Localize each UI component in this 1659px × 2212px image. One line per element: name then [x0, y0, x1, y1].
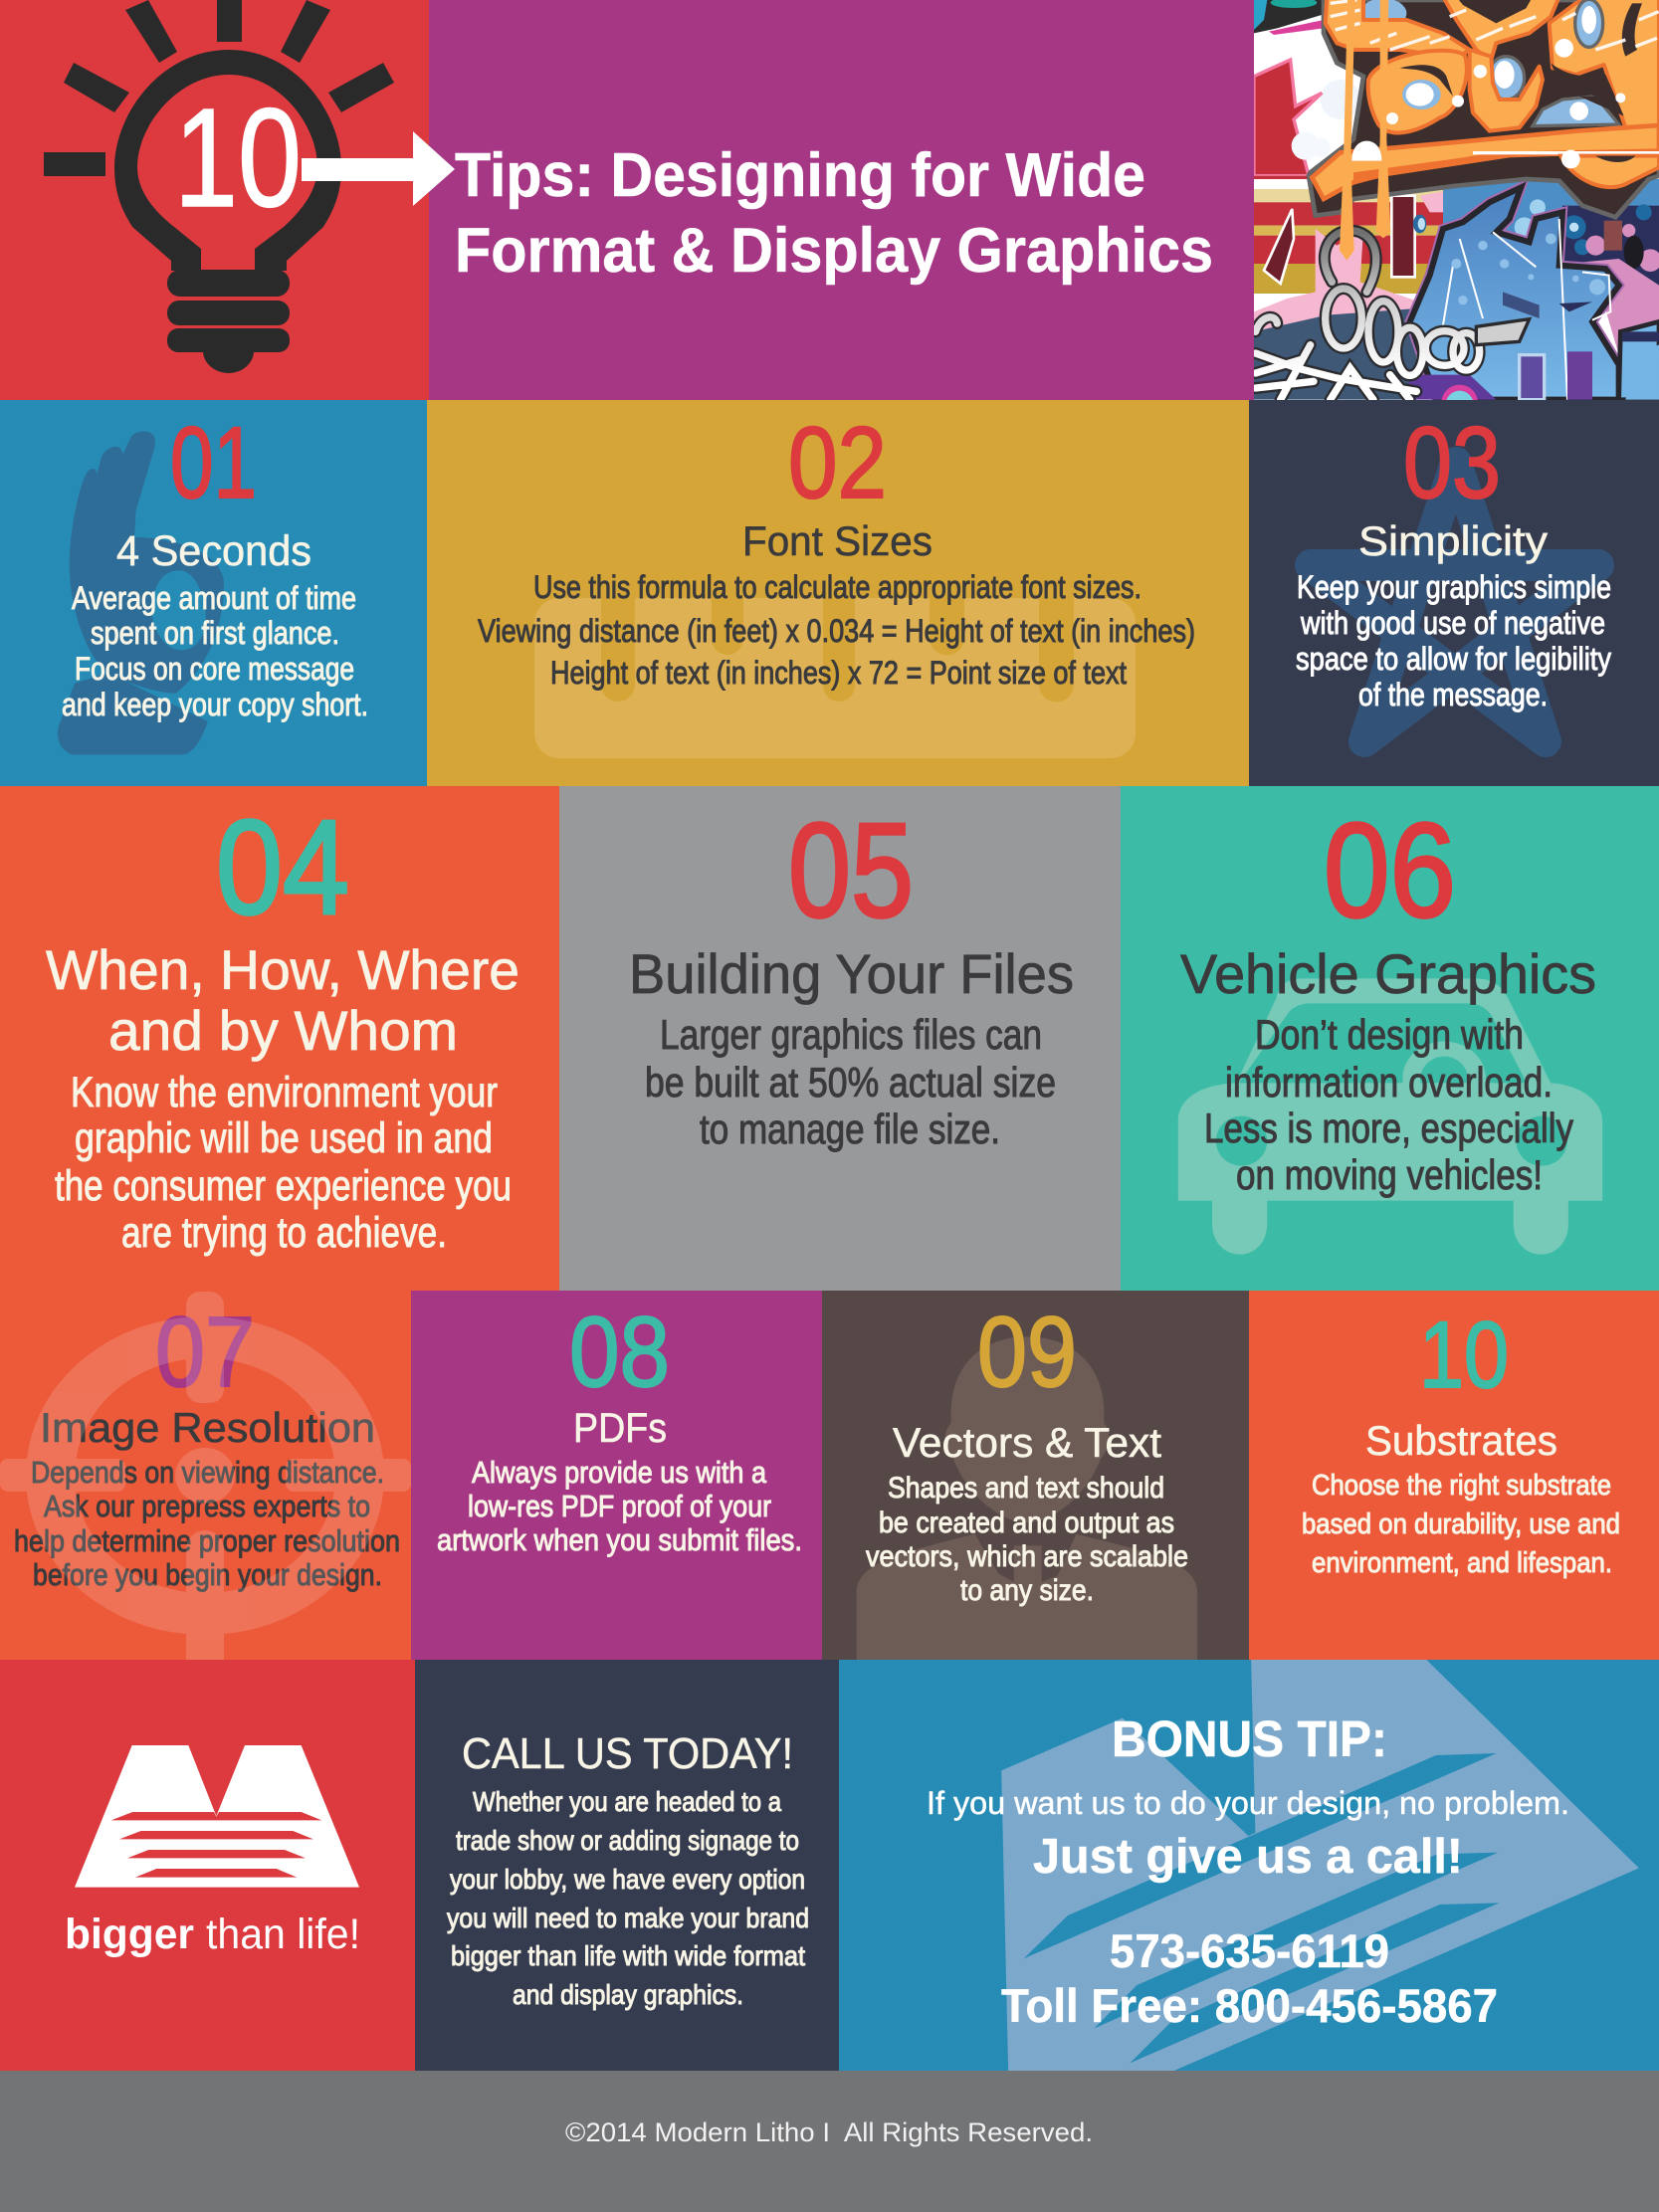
panel: bonus tip: [839, 1660, 1659, 2071]
icon: ruler: [534, 598, 1136, 758]
text block: trade show or adding signage to: [456, 1825, 799, 1856]
title: [455, 141, 1213, 286]
text block: information overload.: [1225, 1059, 1553, 1106]
text block: [447, 1786, 809, 2010]
text block: Focus on core message: [75, 651, 354, 687]
panel: tip 07: [0, 1291, 411, 1660]
text block: [1296, 569, 1611, 712]
text block: [55, 1069, 512, 1257]
number 07: 07: [155, 1297, 255, 1408]
tagline: bigger: [65, 1910, 194, 1958]
heading: Substrates: Substrates: [1365, 1417, 1557, 1464]
text block: and keep your copy short.: [62, 687, 368, 722]
panel: graffiti image: [1254, 0, 1659, 421]
title: Format & Display Graphics: [455, 216, 1213, 286]
text block: with good use of negative: [1300, 605, 1605, 641]
text block: before you begin your design.: [33, 1557, 382, 1592]
number 05: 05: [788, 795, 914, 945]
text block: help determine proper resolution: [14, 1523, 400, 1558]
text block: [866, 1472, 1188, 1607]
panel: tip 01: [0, 400, 427, 786]
text block: space to allow for legibility: [1296, 641, 1611, 677]
title: Tips: Designing for Wide: [455, 141, 1145, 210]
icon: M logo: [75, 1745, 359, 1888]
number 03: 03: [1403, 406, 1501, 519]
panel: call us today: [415, 1660, 839, 2071]
heading: Image Resolution: Image Resolution: [40, 1404, 375, 1451]
number 09: 09: [977, 1297, 1077, 1408]
text block: Whether you are headed to a: [473, 1786, 781, 1817]
number 06: 06: [1324, 795, 1456, 945]
heading: Font Sizes: Font Sizes: [742, 517, 933, 564]
number 04: 04: [216, 792, 349, 942]
text block: the consumer experience you: [55, 1162, 512, 1210]
panel: tip 10: [1249, 1291, 1659, 1660]
text block: are trying to achieve.: [121, 1209, 447, 1257]
heading: Building Your Files: Building Your Files: [629, 942, 1074, 1005]
text block: your lobby, we have every option: [450, 1864, 805, 1895]
text block: Don’t design with: [1255, 1011, 1524, 1058]
text block: Know the environment your: [71, 1069, 498, 1116]
heading: When, How, Where and by Whom: [46, 938, 519, 1062]
text block: be created and output as: [879, 1507, 1174, 1539]
icon: lightbulb with 10: [44, 0, 394, 373]
heading: PDFs: PDFs: [573, 1404, 667, 1451]
text block: Depends on viewing distance.: [31, 1455, 384, 1490]
text block: [1302, 1470, 1620, 1579]
orange letters: [1326, 0, 1659, 132]
text block: to manage file size.: [700, 1106, 1000, 1152]
panel: tip 02: [427, 400, 1249, 786]
panel: tip 08: [411, 1291, 822, 1660]
icon: hand: [58, 431, 224, 754]
arrow: [302, 131, 455, 206]
heading: Vectors & Text: Vectors & Text: [893, 1419, 1161, 1466]
text block: [62, 580, 368, 722]
icon: car: [1178, 978, 1602, 1255]
heading: 4 Seconds: 4 Seconds: [116, 527, 311, 575]
number 10: 10: [1419, 1303, 1509, 1408]
footer: [0, 2071, 1659, 2212]
icon: person: [857, 1336, 1197, 1661]
text block: Less is more, especially: [1204, 1105, 1573, 1151]
text block: bonus tip: Toll Free: 800-456-5867: [1001, 1979, 1498, 2032]
text block: on moving vehicles!: [1236, 1151, 1543, 1198]
text block: bonus tip: Just give us a call!: [1033, 1830, 1463, 1884]
text block: Viewing distance (in feet) x 0.034 = Height of text (in inches): [478, 613, 1195, 649]
text block: of the message.: [1358, 677, 1548, 712]
text block: bonus tip: BONUS TIP:: [1112, 1710, 1387, 1767]
panel: title: [302, 0, 1254, 400]
text block: bonus tip: [927, 1710, 1569, 2032]
heading: When, How, Where and by Whom: and by Whom: [108, 999, 458, 1062]
icon: M logo watermark: [1001, 1660, 1639, 2071]
text block: be built at 50% actual size: [645, 1059, 1056, 1106]
text block: bonus tip: If you want us to do your design, no problem.: [927, 1785, 1569, 1821]
text block: environment, and lifespan.: [1312, 1547, 1612, 1579]
panel: tip 09: [822, 1291, 1249, 1661]
heading: Simplicity: Simplicity: [1358, 517, 1548, 564]
text block: [478, 569, 1195, 691]
text block: [437, 1455, 802, 1557]
text block: low-res PDF proof of your: [468, 1489, 771, 1523]
panel: tip 03: [1249, 400, 1659, 786]
number 01: 01: [170, 406, 257, 519]
text block: spent on first glance.: [91, 615, 339, 651]
text block: Ask our prepress experts to: [44, 1489, 370, 1523]
text block: Shapes and text should: [888, 1472, 1164, 1505]
tagline: than life!: [206, 1910, 360, 1958]
icon: lightbulb with 10: 10: [174, 79, 302, 236]
background holes between the letters: [1360, 0, 1619, 126]
footer: ©2014 Modern Litho I All Rights Reserved.: [565, 2117, 1093, 2147]
heading: CALL US TODAY!: CALL US TODAY!: [462, 1729, 793, 1778]
text block: Use this formula to calculate appropriate font sizes.: [533, 569, 1141, 605]
heading: When, How, Where and by Whom: When, How, Where: [46, 938, 519, 1001]
icon: target: [0, 1292, 411, 1660]
text block: [14, 1455, 400, 1592]
text block: based on durability, use and: [1302, 1508, 1620, 1540]
panel: logo: [0, 1660, 415, 2071]
text block: you will need to make your brand: [447, 1903, 809, 1933]
text block: graphic will be used in and: [75, 1114, 493, 1162]
heading: Vehicle Graphics: Vehicle Graphics: [1180, 942, 1596, 1005]
text block: Height of text (in inches) x 72 = Point size of text: [550, 655, 1127, 691]
text block: Choose the right substrate: [1312, 1470, 1611, 1502]
panel: tip 06: [1121, 786, 1659, 1291]
panel: lightbulb header: [0, 0, 429, 400]
text block: Average amount of time: [72, 580, 356, 616]
panel: tip 05: [559, 786, 1121, 1291]
number 08: 08: [569, 1297, 670, 1408]
text block: to any size.: [960, 1574, 1094, 1607]
text block: and display graphics.: [513, 1979, 743, 2010]
text block: Always provide us with a: [472, 1455, 767, 1490]
text block: Larger graphics files can: [660, 1011, 1042, 1058]
text block: [1204, 1011, 1573, 1198]
text block: vectors, which are scalable: [866, 1540, 1188, 1573]
text block: artwork when you submit files.: [437, 1522, 802, 1557]
text block: bonus tip: 573-635-6119: [1110, 1924, 1389, 1977]
panel: tip 04: [0, 786, 559, 1291]
icon: star: [1311, 463, 1598, 741]
text block: [645, 1011, 1056, 1152]
text block: bigger than life with wide format: [451, 1940, 805, 1971]
number 02: 02: [788, 406, 887, 519]
